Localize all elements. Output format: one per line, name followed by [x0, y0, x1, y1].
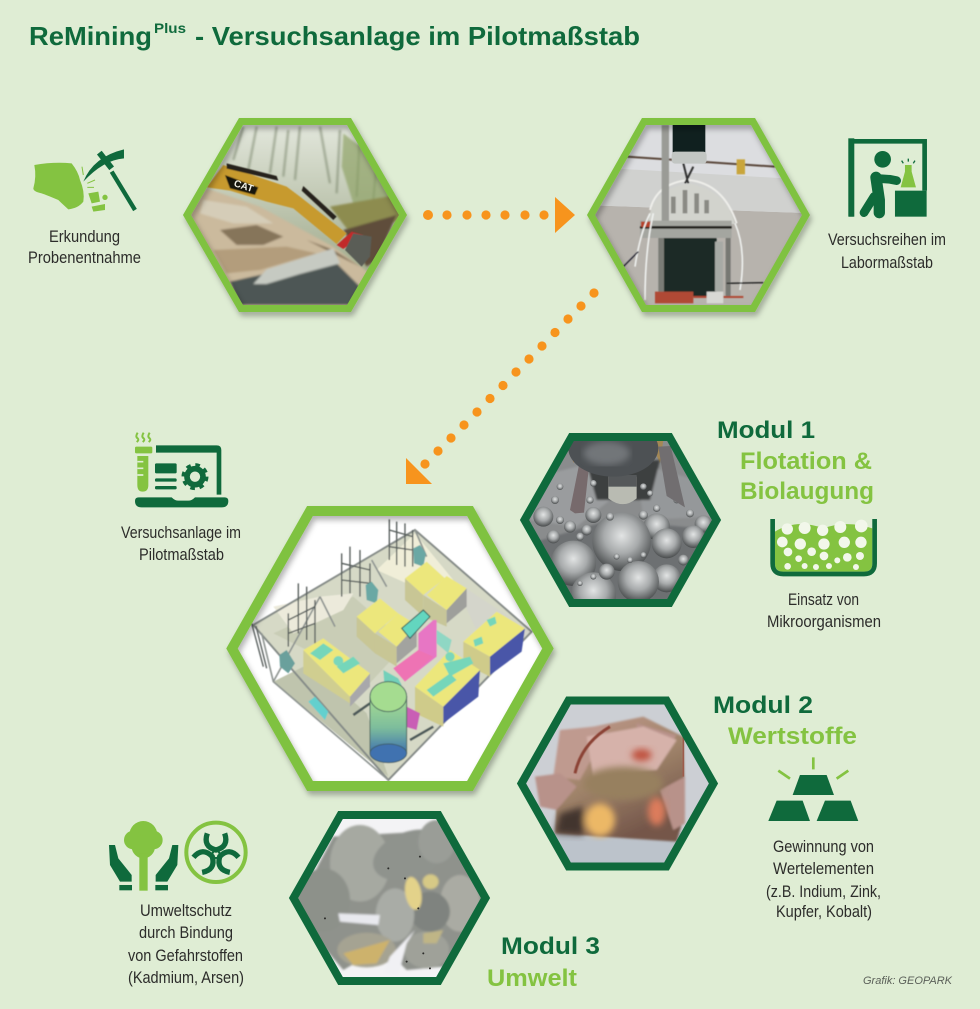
green vertical tank — [370, 682, 407, 763]
icon: laptop with test tube and gear — [135, 433, 228, 507]
label: Umweltschutz: von Gefahrstoffen — [128, 946, 243, 965]
icon: rock and pickaxe — [33, 149, 135, 212]
dotted arrow: horizontal — [423, 197, 575, 233]
icon: gold bars — [768, 757, 858, 821]
heading: Modul 3: Umwelt — [487, 965, 577, 992]
heading: Modul 1: Biolaugung — [740, 478, 874, 505]
hexagon photo: excavator — [183, 117, 410, 317]
label: Versuchsanlage im Pilotmaßstab: Versuchsanlage im — [121, 523, 241, 542]
yellow tanks — [303, 562, 525, 727]
label: Versuchsreihen im Labormaßstab: Labormaßstab — [841, 253, 933, 272]
label: Gewinnung von Wertelementen: Gewinnung von — [773, 837, 874, 856]
heading: Modul 2: Modul 2 — [713, 692, 813, 719]
label: Einsatz von Mikroorganismen: Einsatz von — [788, 590, 859, 609]
heading: Modul 3 — [487, 933, 600, 992]
label: Umweltschutz — [128, 901, 244, 987]
heading: Modul 1 — [717, 417, 874, 505]
label: Umweltschutz: (Kadmium, Arsen) — [128, 968, 244, 987]
dotted arrow: diagonal — [406, 288, 599, 484]
heading: Modul 1: Modul 1 — [717, 417, 815, 444]
label: Erkundung Probenentnahme: Erkundung — [49, 227, 120, 246]
credit: Grafik: GEOPARK — [863, 975, 953, 987]
label: Gewinnung von Wertelementen — [766, 837, 881, 921]
label: Gewinnung von Wertelementen: (z.B. Indium, Zink, — [766, 882, 881, 901]
hexagon photo: flotation bubbles — [520, 433, 721, 607]
heading: Modul 2: Wertstoffe — [728, 723, 857, 750]
label: Einsatz von Mikroorganismen — [767, 590, 881, 631]
heading: Modul 2 — [713, 692, 857, 750]
hexagon photo: grey rocks — [287, 808, 493, 988]
icon: basin with microorganisms — [773, 519, 875, 574]
label: Erkundung Probenentnahme — [28, 227, 141, 267]
icon: person in lab with flask — [848, 138, 927, 217]
hexagon: pilot plant drawing — [226, 506, 554, 791]
label: Versuchsreihen im Labormaßstab: Versuchsreihen im — [828, 230, 946, 249]
title: ReMining — [29, 21, 152, 51]
heading: Modul 3: Modul 3 — [501, 933, 600, 960]
hexagon photo: lab reactor — [583, 117, 813, 317]
hexagon photo: copper foil — [513, 693, 723, 873]
label: Versuchsreihen im Labormaßstab — [828, 230, 946, 272]
excavator logo: CAT — [232, 178, 255, 195]
title — [29, 20, 640, 51]
label: Einsatz von Mikroorganismen: Mikroorganismen — [767, 612, 881, 631]
label: Versuchsanlage im Pilotmaßstab: Pilotmaßstab — [139, 545, 224, 564]
heading: Modul 1: Flotation & — [740, 448, 872, 475]
label: Erkundung Probenentnahme: Probenentnahme — [28, 248, 141, 267]
label: Umweltschutz: Umweltschutz — [140, 901, 232, 920]
pink duct and teal box — [308, 610, 452, 740]
title: - Versuchsanlage im Pilotmaßstab — [195, 21, 640, 51]
title: Plus — [154, 20, 186, 36]
label: Umweltschutz: durch Bindung — [139, 923, 233, 942]
label: Versuchsanlage im Pilotmaßstab — [121, 523, 241, 564]
icon: hands with tree and biohazard — [109, 821, 246, 891]
label: Gewinnung von Wertelementen: Kupfer, Kobalt) — [776, 902, 872, 921]
label: Gewinnung von Wertelementen: Wertelementen — [773, 859, 874, 878]
